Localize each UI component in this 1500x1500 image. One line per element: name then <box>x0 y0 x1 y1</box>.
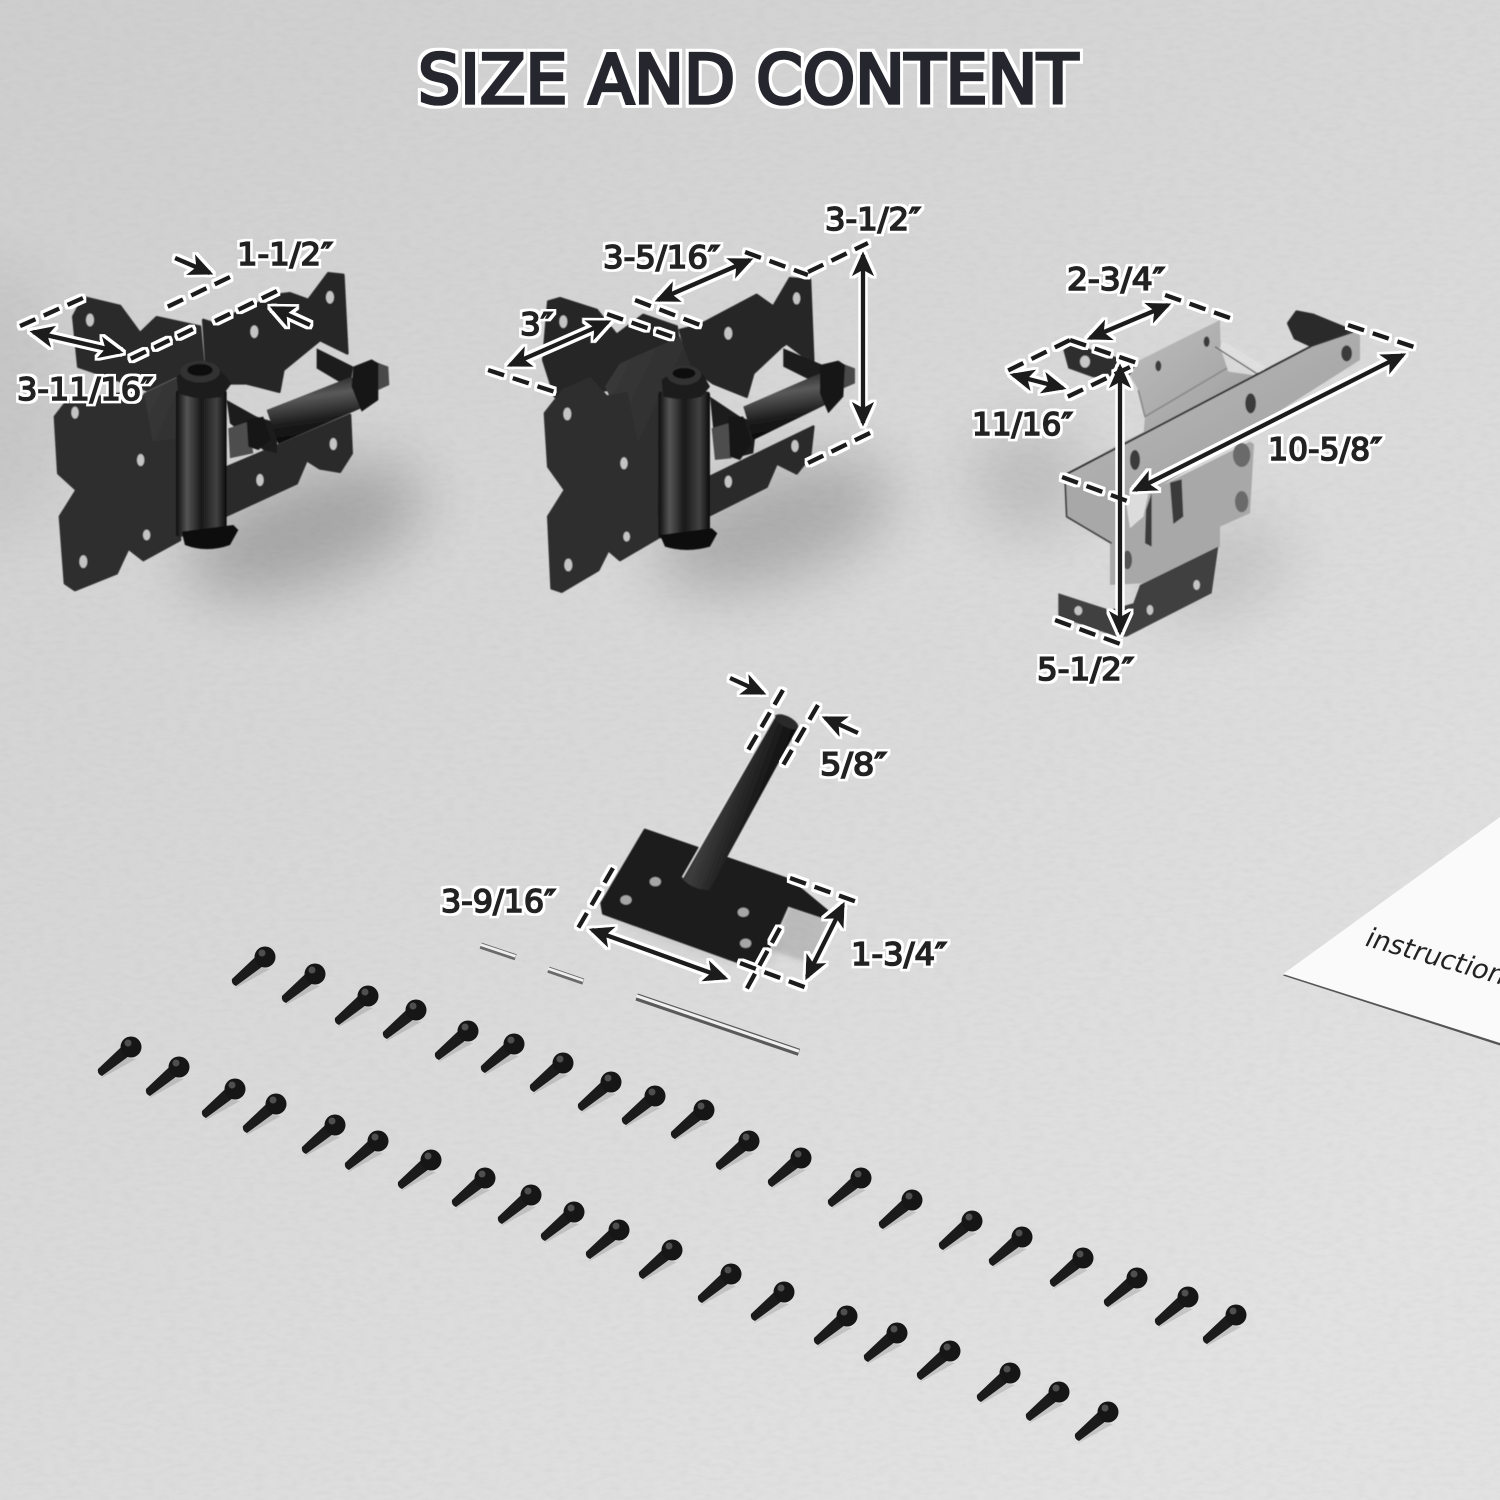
label 10-5/8: 10-5/8″ <box>1268 432 1382 468</box>
cylinder <box>176 390 227 537</box>
threads right <box>375 362 389 390</box>
top bracket <box>710 348 827 457</box>
right plate <box>680 278 813 397</box>
label 3: 3″ <box>520 307 553 343</box>
screws: upper row <box>232 946 1247 1347</box>
back left plate <box>543 298 680 397</box>
top tab <box>1063 343 1137 377</box>
label 3-1/2: 3-1/2″ <box>825 202 921 238</box>
hinge one <box>55 273 389 590</box>
nut right <box>820 361 845 413</box>
nut right <box>352 359 378 412</box>
barrel <box>267 377 365 444</box>
nut left <box>247 417 271 450</box>
threads left <box>228 422 253 458</box>
curved cutout <box>1127 492 1148 528</box>
lower right plate <box>217 415 352 520</box>
long pin <box>637 996 799 1052</box>
bottom cap <box>660 528 717 550</box>
threads right <box>842 363 855 388</box>
right plate <box>203 273 347 392</box>
long bar <box>1065 332 1360 505</box>
flange <box>788 883 830 918</box>
dimensions: hinge two <box>488 202 921 463</box>
base plate holes <box>620 877 751 948</box>
lower right plate <box>700 427 813 520</box>
short pin one <box>481 945 516 957</box>
gate latch <box>1058 312 1360 637</box>
front plate <box>55 392 180 590</box>
title: SIZE AND CONTENT <box>418 41 1078 120</box>
top bracket <box>227 348 353 453</box>
short pin two <box>548 969 583 982</box>
top cap <box>177 365 232 399</box>
main body <box>1065 442 1254 585</box>
lower dark plate <box>1058 547 1218 637</box>
tube <box>682 715 798 890</box>
dimensions: hinge one <box>17 237 333 408</box>
instruction sheet <box>1283 817 1500 1046</box>
label 3-9/16: 3-9/16″ <box>441 884 556 920</box>
post bracket <box>602 711 830 963</box>
soft shadows <box>0 260 1307 974</box>
mid plate <box>143 367 213 520</box>
label 3-5/16: 3-5/16″ <box>603 240 720 276</box>
label 1-3/4: 1-3/4″ <box>851 937 947 973</box>
top cap <box>662 370 710 399</box>
barrel <box>743 373 828 440</box>
label 11/16: 11/16″ <box>972 407 1073 443</box>
cylinder <box>658 392 710 538</box>
screws: lower row <box>98 1036 1119 1444</box>
dimensions: post bracket <box>441 678 947 992</box>
label 2-3/4: 2-3/4″ <box>1067 262 1165 298</box>
front plate <box>545 378 660 592</box>
spring <box>1222 345 1263 370</box>
left flange edge <box>1065 477 1112 543</box>
mid plate <box>605 337 693 520</box>
base plate <box>602 830 790 963</box>
back left plate <box>73 297 203 390</box>
body holes and slots <box>1123 336 1352 569</box>
dimensions: latch <box>972 262 1417 688</box>
hook <box>1288 312 1350 347</box>
bottom cap <box>182 525 238 549</box>
hinge two <box>543 278 855 592</box>
label 5-1/2: 5-1/2″ <box>1037 652 1134 688</box>
pins <box>481 945 799 1052</box>
label 5/8: 5/8″ <box>820 747 887 783</box>
plate holes <box>71 291 337 568</box>
nut left <box>728 417 752 460</box>
label 1-1/2: 1-1/2″ <box>237 237 333 273</box>
threads left <box>712 423 732 460</box>
upper plate <box>1130 320 1263 437</box>
lower holes <box>1074 580 1200 615</box>
label 3-11/16: 3-11/16″ <box>17 372 153 408</box>
plate holes <box>559 292 800 571</box>
